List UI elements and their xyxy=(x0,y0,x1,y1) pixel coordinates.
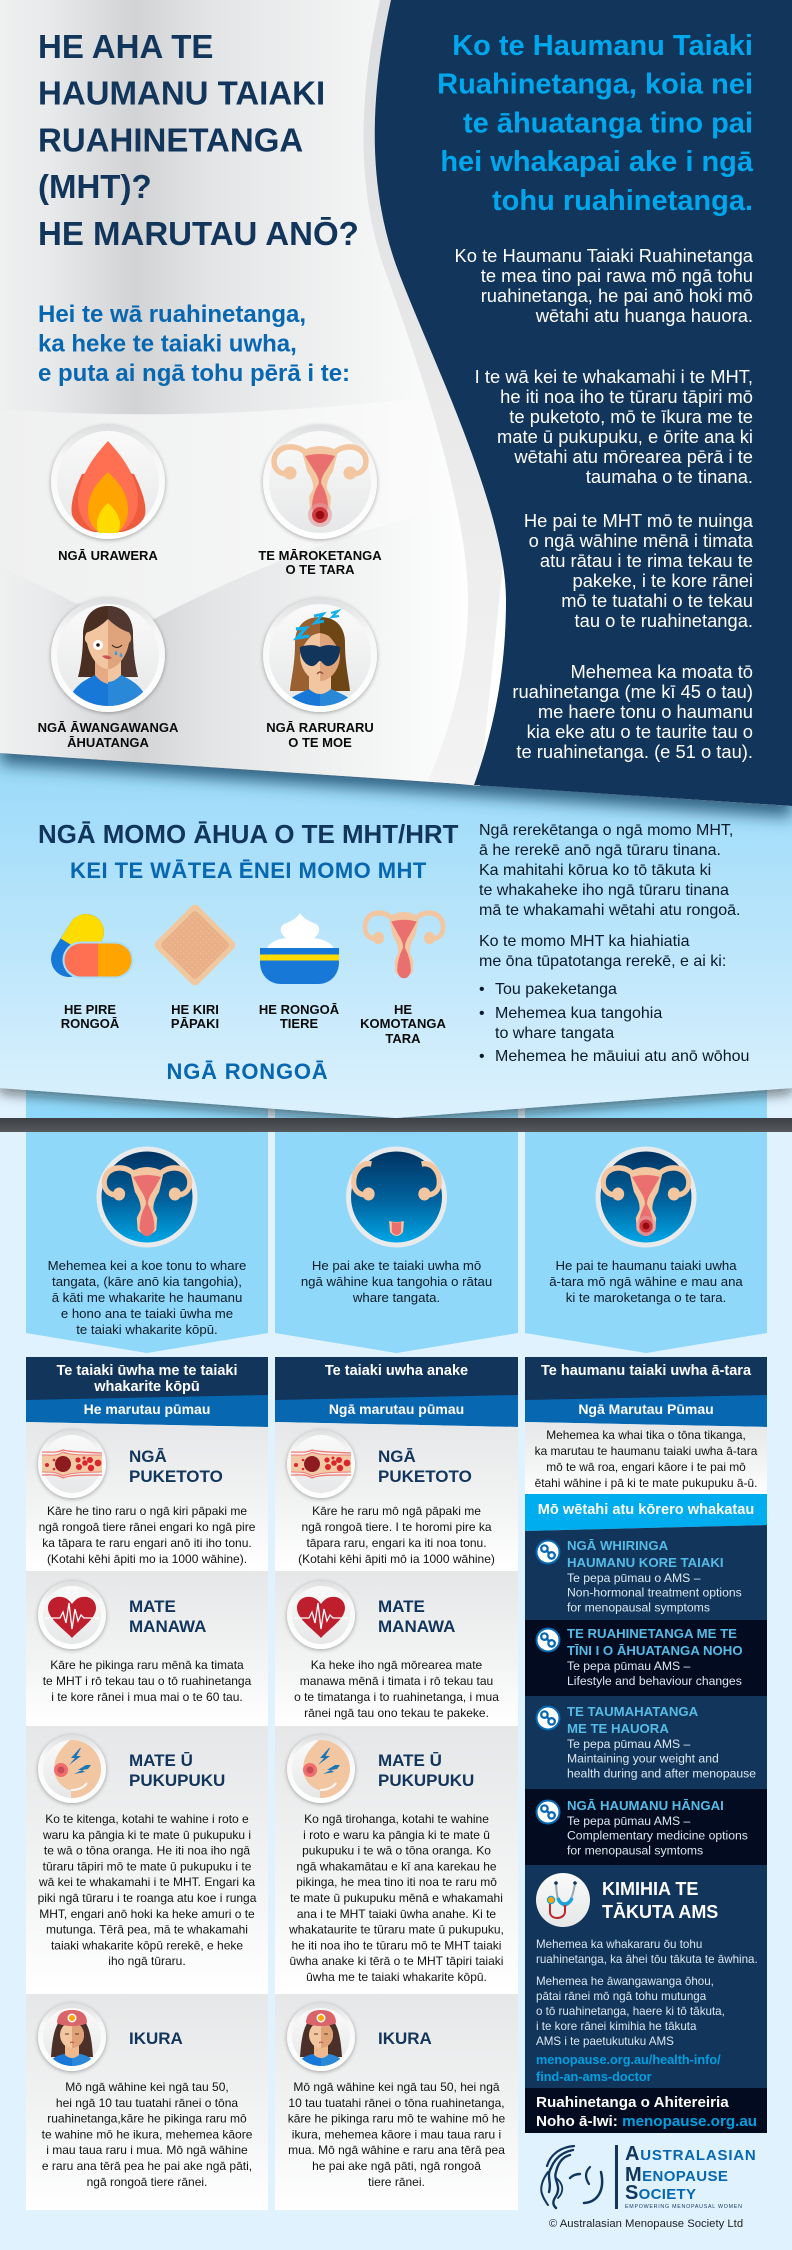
panel: top section xyxy=(0,0,792,806)
label: patch: PĀPAKI xyxy=(171,1016,219,1031)
bullet list: Mehemea kua tangohia xyxy=(495,1005,662,1022)
card: breast cancer: wā kei te whakamahi i te MHT. Engari ka xyxy=(38,1875,255,1889)
link: complementary: Complementary medicine options xyxy=(567,1829,748,1843)
card: breast cancer: ūwha me te taiaki whakarite kōpū. xyxy=(306,1970,487,1984)
heading: types of MHT/HRT: NGĀ MOMO ĀHUA O TE MHT/HRT xyxy=(38,821,459,849)
link: non-hormonal: HAUMANU KORE TAIAKI xyxy=(567,1555,724,1570)
card: blood clots: (Kotahi kēhi āpiti mo ia 1000 wāhine). xyxy=(47,1552,247,1566)
logo: Australasian Menopause Society: AUSTRALASIAN xyxy=(625,2143,757,2165)
right intro heading: Ko te Haumanu Taiaki xyxy=(452,30,753,62)
label: vaginal: TARA xyxy=(385,1031,421,1046)
label: vaginal dryness: O TE TARA xyxy=(285,562,355,577)
copyright: © Australasian Menopause Society Ltd xyxy=(549,2218,743,2230)
card: blood clots: (Kotahi kēhi āpiti mō ia 1000 wāhine) xyxy=(298,1552,495,1566)
card: blood clots: ngā rongoā tiere. I te horomi pire ka xyxy=(301,1520,492,1534)
text: differences in MHT: te whakaheke iho ngā tūraru tinana xyxy=(479,882,729,899)
card: heart disease: o te timatanga i to ruahinetanga, i mua xyxy=(294,1690,499,1704)
text: column 1 intro: te taiaki whakarite kōpū. xyxy=(76,1322,218,1337)
card: heart disease xyxy=(26,1571,268,1726)
text: paragraph 2: mate ū pukupuku, e ōrite ana ki xyxy=(497,426,753,447)
link: weight: TE TAUMAHATANGA xyxy=(567,1704,698,1719)
panel: find AMS doctor xyxy=(525,1865,767,2088)
label: sleep problems: O TE MOE xyxy=(288,735,352,750)
label: mood changes: NGĀ ĀWANGAWANGA xyxy=(38,720,178,735)
card: vaginal safety: Mehemea ka whai tika o tōna tikanga, xyxy=(546,1428,746,1442)
text: paragraph 1: ruahinetanga, he pai anō hoki mō xyxy=(481,285,753,306)
card: breast cancer: ngā whakamātau e kī ana karekau he xyxy=(296,1859,497,1873)
text: column 2 intro: He pai ake te taiaki uwha mō xyxy=(312,1258,481,1273)
bullet list xyxy=(479,981,749,1065)
header: column 3: Ngā Marutau Pūmau xyxy=(578,1401,714,1417)
logo: Australasian Menopause Society: SOCIETY xyxy=(625,2182,696,2204)
card: blood clots: ngā rongoā tiere rānei engari ko ngā pire xyxy=(39,1520,256,1534)
label: patch: HE KIRI xyxy=(171,1002,219,1017)
card: vaginal safety: ka marutau te haumanu taiaki uwha ā-tara xyxy=(535,1444,758,1458)
card: stroke: ruahinetanga,kāre he pikinga raru mō xyxy=(47,2112,247,2126)
text: differences in MHT: Ka mahitahi kōrua ko tō tākuta ki xyxy=(479,862,711,879)
card: stroke xyxy=(275,1994,518,2210)
card: breast cancer: taiaki whakarite kōpū rerekē, e heke xyxy=(51,1938,243,1952)
icon: hot flushes flame xyxy=(51,425,165,539)
link: complementary: NGĀ HAUMANU HĀNGAI xyxy=(567,1798,724,1813)
link: lifestyle: Lifestyle and behaviour changes xyxy=(567,1674,742,1688)
link: weight: health during and after menopause xyxy=(567,1766,756,1780)
text: paragraph 3: mō te tuatahi o te tekau xyxy=(561,590,753,611)
card: stroke: e raru ana tērā pea he pai ake ngā pāti, xyxy=(42,2159,252,2173)
label: vaginal: HE xyxy=(394,1002,412,1017)
card: stroke: mua. Mō ngā wāhine e raru ana tērā pea xyxy=(288,2143,505,2157)
card: heart disease: rānei ngā tau ono tekau te pakeke. xyxy=(304,1706,489,1720)
text: paragraph 3: o ngā wāhine mēnā i timata xyxy=(529,530,754,551)
card: breast cancer: ūwha anake ki tērā o te MHT tāpiri taiaki xyxy=(290,1954,503,1968)
bullet list: • xyxy=(479,1048,485,1065)
icon: stethoscope xyxy=(536,1873,590,1927)
panel: website footer: menopause.org.au xyxy=(622,2113,757,2130)
text: depends on: Ko te momo MHT ka hiahiatia xyxy=(479,933,689,950)
text: paragraph 1: te mea tino pai rawa mō ngā tohu xyxy=(481,265,753,286)
link: non-hormonal: NGĀ WHIRINGA xyxy=(567,1538,668,1553)
card: blood clots: NGĀ xyxy=(129,1447,167,1466)
card: breast cancer: waru ka pāngia ki te mate ū pukupuku i xyxy=(42,1828,251,1842)
right intro heading: hei whakapai ake i ngā xyxy=(440,146,754,178)
card: breast cancer: he iti noa iho te tūraru mō te MHT taiaki xyxy=(292,1938,501,1952)
card: breast cancer: te mate ū pukupuku mēnā e whakamahi xyxy=(290,1891,503,1905)
header: column 1: He marutau pūmau xyxy=(84,1401,210,1417)
right intro heading: te āhuatanga tino pai xyxy=(463,107,753,139)
card: blood clots: PUKETOTO xyxy=(378,1467,472,1486)
bullet list: Tou pakeketanga xyxy=(495,981,617,998)
header: column 3: Te haumanu taiaki uwha ā-tara xyxy=(541,1363,752,1379)
card: blood clots: Kāre he tino raru o ngā kiri pāpaki me xyxy=(47,1504,247,1518)
band: more information xyxy=(525,1494,767,1531)
subheading: ka heke te taiaki uwha, xyxy=(38,330,297,358)
title: (MHT)? xyxy=(38,168,152,205)
card: blood clots: NGĀ xyxy=(378,1447,416,1466)
label: gel: TIERE xyxy=(280,1016,318,1031)
bullet list: to whare tangata xyxy=(495,1025,614,1042)
card: stroke: IKURA xyxy=(378,2029,432,2048)
card: breast cancer: i roto e waru ka pāngia ki te mate ū xyxy=(303,1828,490,1842)
card: stroke: i mau taua raru i mua. Mō ngā wāhine xyxy=(46,2143,248,2157)
panel: navy curve xyxy=(375,0,792,806)
icon: column 1 uterus xyxy=(96,1146,198,1248)
icon: column 3 uterus with dot xyxy=(596,1146,696,1248)
header: column 3 xyxy=(525,1357,767,1427)
link: complementary: for menopausal symtoms xyxy=(567,1843,703,1857)
header: column 2: Ngā marutau pūmau xyxy=(329,1401,464,1417)
label: pills: HE PIRE xyxy=(64,1002,116,1017)
card: blood clots: ka tāpara te raru engari anō iti iho tonu. xyxy=(42,1536,252,1550)
text: column 2 intro: whare tangata. xyxy=(352,1290,440,1305)
card: breast cancer: piki ngā tūraru i te roanga atu koe i runga xyxy=(38,1891,257,1905)
text: depends on: me ōna tūpatotanga rerekē, e ai ki: xyxy=(479,953,726,970)
card: breast cancer: MATE Ū xyxy=(129,1751,193,1770)
link: non-hormonal: for menopausal symptoms xyxy=(567,1600,710,1614)
card: heart disease: i te kore rānei i mua mai o te 60 tau. xyxy=(51,1690,243,1704)
card: stroke: IKURA xyxy=(129,2029,183,2048)
subheading: available forms: KEI TE WĀTEA ĒNEI MOMO MHT xyxy=(70,858,427,883)
card: stroke: Mō ngā wāhine kei ngā tau 50, xyxy=(65,2080,229,2094)
card: breast cancer: MHT, engari anō hoki ka heke amuri o te xyxy=(39,1907,255,1921)
panel: column 2 cards xyxy=(275,1357,518,2210)
link: non-hormonal: Te pepa pūmau o AMS – xyxy=(567,1571,700,1585)
text: paragraph 2: taumaha o te tinana. xyxy=(586,466,753,487)
card: breast cancer: MATE Ū xyxy=(378,1751,442,1770)
card: heart disease: MATE xyxy=(378,1597,425,1616)
label: gel: HE RONGOĀ xyxy=(259,1002,339,1017)
subheading: e puta ai ngā tohu pērā i te: xyxy=(38,360,350,387)
card: blood clots: PUKETOTO xyxy=(129,1467,223,1486)
link: complementary: Te pepa pūmau AMS – xyxy=(567,1814,690,1828)
link: weight: ME TE HAUORA xyxy=(567,1721,669,1736)
text: paragraph 3: atu rātau i te rima tekau te xyxy=(540,550,753,571)
card: breast cancer: PUKUPUKU xyxy=(129,1771,225,1790)
panel: find AMS doctor: TĀKUTA AMS xyxy=(602,1902,718,1922)
panel: column 3 xyxy=(525,1357,767,2133)
dark separator bar xyxy=(0,1118,792,1132)
card: breast cancer: pikinga, he mea tino iti noa te raru mō xyxy=(296,1875,497,1889)
icon: vaginal dryness xyxy=(263,425,377,539)
logo: Australasian Menopause Society: EMPOWERING MENOPAUSAL WOMEN xyxy=(625,2204,743,2210)
link: lifestyle: Te pepa pūmau AMS – xyxy=(567,1659,690,1673)
card: blood clots: Kāre he raru mō ngā pāpaki me xyxy=(312,1504,481,1518)
text: paragraph 3: pakeke, i te kore rānei xyxy=(573,570,753,591)
icon: woman with mood changes xyxy=(51,598,165,712)
panel: blue types of MHT section xyxy=(0,740,792,1132)
panel: website footer xyxy=(525,2088,767,2133)
card: stroke: kāre he pikinga raru mō te wahine mō he xyxy=(288,2112,506,2126)
card: blood clots xyxy=(275,1422,518,1571)
panel: find AMS doctor: menopause.org.au/health-info/ xyxy=(536,2053,721,2067)
text: column 1 intro: e hono ana te taiaki ūwha me xyxy=(61,1306,233,1321)
bullet list: • xyxy=(479,1005,485,1022)
title: HAUMANU TAIAKI xyxy=(38,75,325,112)
panel: find AMS doctor: ruahinetanga, ka āhei tōu tākuta te āwhina. xyxy=(536,1953,758,1966)
link: lifestyle: TE RUAHINETANGA ME TE xyxy=(567,1626,737,1641)
icon: column 2 no uterus xyxy=(346,1146,447,1248)
text: paragraph 2: I te wā kei te whakamahi i te MHT, xyxy=(475,366,753,387)
card: breast cancer: te wā o tōna oranga. He iti noa iho ngā xyxy=(44,1844,250,1858)
text: paragraph 3: tau o te ruahinetanga. xyxy=(575,610,753,631)
link: weight xyxy=(525,1696,767,1789)
card: heart disease: Ka heke iho ngā mōrearea mate xyxy=(311,1658,482,1672)
bullet list: • xyxy=(479,981,485,998)
text: column 3 intro: ā-tara mō ngā wāhine e mau ana xyxy=(549,1274,743,1289)
icon: pills xyxy=(62,914,134,978)
link: lifestyle: TĪNI I O ĀHUATANGA NOHO xyxy=(567,1643,743,1658)
card: breast cancer: Ko ngā tirohanga, kotahi te wahine xyxy=(304,1812,489,1826)
band: more information: Mō wētahi atu kōrero whakatau xyxy=(538,1502,754,1518)
card: breast cancer: ana i te MHT taiaki ūwha anahe. Ki te xyxy=(297,1907,496,1921)
text: column 1 intro: tangata, (kāre anō kia tangohia), xyxy=(52,1274,242,1289)
text: paragraph 2: he iti noa iho te tūraru tāpiri mō xyxy=(500,386,753,407)
card: heart disease: te MHT i rō tekau tau o tō ruahinetanga xyxy=(43,1674,252,1688)
card: stroke: hei ngā 10 tau tuatahi rānei o tōna xyxy=(56,2096,238,2110)
card: breast cancer xyxy=(275,1726,518,1994)
text: paragraph 4: ruahinetanga (me kī 45 o tau) xyxy=(512,681,753,702)
title: HE AHA TE xyxy=(38,28,213,65)
panel: find AMS doctor: find-an-ams-doctor xyxy=(536,2070,652,2084)
panel: find AMS doctor: Mehemea he āwangawanga ōhou, xyxy=(536,1975,714,1988)
heading: medicines: NGĀ RONGOĀ xyxy=(166,1059,328,1084)
card: vaginal safety: ētahi wāhine i pā ki te mate pukupuku ā-ū. xyxy=(535,1476,757,1490)
card: stroke: he pai ake ngā pāti, ngā rongoā xyxy=(312,2159,481,2173)
panel: website footer: Noho ā-Iwi: xyxy=(536,2113,622,2130)
link: lifestyle xyxy=(525,1620,767,1696)
text: column 3 intro: He pai te haumanu taiaki uwha xyxy=(555,1258,737,1273)
panel: website footer: Ruahinetanga o Ahitereiria xyxy=(536,2094,729,2111)
decorative fold xyxy=(0,398,440,621)
icon: skin patch xyxy=(153,903,237,987)
label: vaginal: KOMOTANGA xyxy=(360,1016,446,1031)
bullet list: Mehemea he māuiui atu anō wōhou xyxy=(495,1048,749,1065)
card: breast cancer: iho ngā tūraru. xyxy=(108,1954,186,1968)
card: blood clots: tāpara raru, engari ka iti noa tonu. xyxy=(306,1536,487,1550)
card: stroke: te wahine mō he ikura, mehemea kāore xyxy=(42,2127,253,2141)
title: HE MARUTAU ANŌ? xyxy=(38,215,359,252)
icon: gel cream pot xyxy=(260,913,339,984)
panel: column 1 cards xyxy=(26,1357,268,2210)
title: RUAHINETANGA xyxy=(38,121,303,158)
card: stroke: ngā rongoā tiere rānei. xyxy=(87,2175,207,2189)
panel: find AMS doctor: Mehemea ka whakararu ōu tohu xyxy=(536,1938,702,1951)
card: heart disease: MATE xyxy=(129,1597,176,1616)
subheading: Hei te wā ruahinetanga, xyxy=(38,301,306,328)
label: sleep problems: NGĀ RARURARU xyxy=(266,720,374,735)
card: breast cancer: PUKUPUKU xyxy=(378,1771,474,1790)
header: column 1 xyxy=(26,1357,268,1427)
link: weight: Maintaining your weight and xyxy=(567,1752,719,1766)
curved band xyxy=(363,0,520,786)
label: vaginal dryness: TE MĀROKETANGA xyxy=(258,548,382,563)
header: column 1: Te taiaki ūwha me te taiaki xyxy=(56,1363,238,1379)
label: pills: RONGOĀ xyxy=(61,1016,120,1031)
logo: Australasian Menopause Society: MENOPAUSE xyxy=(625,2164,728,2186)
card: heart disease xyxy=(275,1571,518,1726)
header: column 1: whakarite kōpū xyxy=(93,1379,200,1395)
panel: find AMS doctor: pātai rānei mō ngā tohu mutunga xyxy=(536,1990,707,2003)
card: stroke: tiere rānei. xyxy=(368,2175,425,2189)
card: heart disease: Kāre he pikinga raru mēnā ka timata xyxy=(50,1658,244,1672)
text: column 1 intro: Mehemea kei a koe tonu to whare xyxy=(48,1258,246,1273)
card: heart disease: manawa mēnā i timata i rō tekau tau xyxy=(300,1674,493,1688)
text: paragraph 4: te ruahinetanga. (e 51 o tau). xyxy=(516,741,753,762)
text: paragraph 2: te puketoto, mō te īkura me te xyxy=(509,406,753,427)
card: heart disease: MANAWA xyxy=(129,1617,206,1636)
link: weight: Te pepa pūmau AMS – xyxy=(567,1737,690,1751)
panel: find AMS doctor: i te kore rānei kimihia he tākuta xyxy=(536,2020,697,2033)
logo: Australasian Menopause Society xyxy=(541,2143,757,2210)
card: breast cancer: whakataurite te tūraru mate ū pukupuku, xyxy=(288,1923,504,1937)
text: paragraph 4: me haere tonu o haumanu xyxy=(538,701,753,722)
card: breast cancer: pukupuku i te wā o tōna oranga. Ko xyxy=(302,1844,491,1858)
header: column 2: Te taiaki uwha anake xyxy=(325,1363,468,1379)
card: breast cancer: Ko te kitenga, kotahi te wahine i roto e xyxy=(45,1812,249,1826)
card: stroke: ikura, mehemea kāore i mau taua raru i xyxy=(292,2127,501,2141)
label: hot flushes: NGĀ URAWERA xyxy=(58,548,158,563)
header: column 2 xyxy=(275,1357,518,1427)
card: stroke: 10 tau tuatahi rānei o tōna ruahinetanga, xyxy=(288,2096,505,2110)
card: heart disease: MANAWA xyxy=(378,1617,455,1636)
text: paragraph 4: kia eke atu o te taurite tau o xyxy=(527,721,753,742)
text: column 2 intro: ngā wāhine kua tangohia o rātau xyxy=(301,1274,492,1289)
link: non-hormonal xyxy=(525,1525,767,1620)
text: differences in MHT: ā he rerekē anō ngā tūraru tinana. xyxy=(479,842,721,859)
card: breast cancer: mutunga. Tērā pea, mā te whakamahi xyxy=(46,1923,248,1937)
panel: find AMS doctor: o tō ruahinetanga, haere ki tō tākuta, xyxy=(536,2005,725,2018)
link: complementary xyxy=(525,1789,767,1865)
link: non-hormonal: Non-hormonal treatment options xyxy=(567,1586,742,1600)
card: blood clots xyxy=(26,1422,268,1571)
text: column 3 intro: ki te maroketanga o te tara. xyxy=(566,1290,726,1305)
text: paragraph 4: Mehemea ka moata tō xyxy=(570,661,753,682)
panel: find AMS doctor: KIMIHIA TE xyxy=(602,1879,698,1899)
card: vaginal safety xyxy=(525,1422,767,1494)
right intro heading: Ruahinetanga, koia nei xyxy=(437,69,753,101)
text: differences in MHT: Ngā rerekētanga o ngā momo MHT, xyxy=(479,822,733,839)
label: mood changes: ĀHUATANGA xyxy=(67,735,150,750)
text: paragraph 2: wētahi atu mōrearea pērā i te xyxy=(513,446,753,467)
text: column 1 intro: ā kāti me whakarite he haumanu xyxy=(52,1290,242,1305)
right intro heading: tohu ruahinetanga. xyxy=(492,185,753,217)
text: paragraph 3: He pai te MHT mō te nuinga xyxy=(524,510,753,531)
column backgrounds xyxy=(26,1085,767,1353)
card: stroke xyxy=(26,1994,268,2210)
panel: find AMS doctor: AMS i te paetukutuku AMS xyxy=(536,2035,674,2048)
text: paragraph 1: Ko te Haumanu Taiaki Ruahinetanga xyxy=(455,245,753,266)
card: breast cancer xyxy=(26,1726,268,1994)
text: paragraph 1: wētahi atu huanga hauora. xyxy=(535,305,753,326)
icon: vaginal uterus xyxy=(365,912,443,978)
card: stroke: Mō ngā wāhine kei ngā tau 50, hei ngā xyxy=(293,2080,500,2094)
card: vaginal safety: mō te wā roa, engari kāore i te pai mō xyxy=(546,1460,746,1474)
text: differences in MHT: mā te whakamahi wētahi atu rongoā. xyxy=(479,902,740,919)
card: breast cancer: tūraru tāpiri mō te mate ū pukupuku i te xyxy=(43,1859,252,1873)
icon: woman sleeping with mask xyxy=(263,598,377,712)
